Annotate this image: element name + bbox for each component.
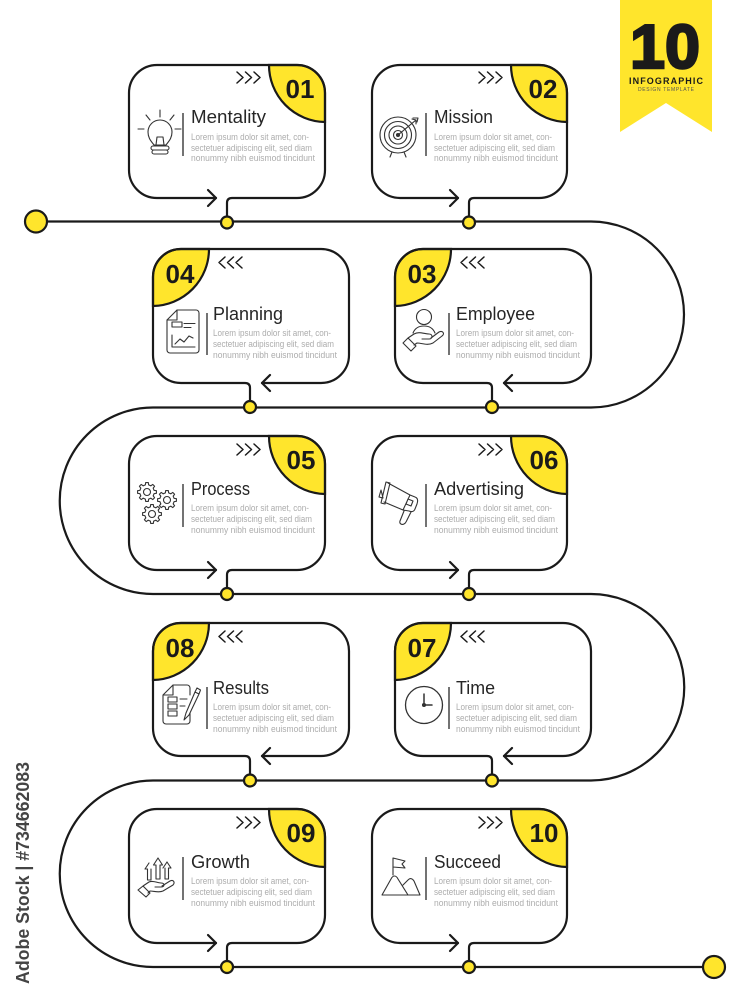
card 09: Growth: Growth	[191, 851, 250, 872]
card 08: Results: sectetuer adipiscing elit, sed diam	[213, 713, 334, 724]
card 04: Planning: nonummy nibh euismod tincidunt	[213, 350, 337, 361]
timeline node	[221, 588, 233, 600]
card 04: Planning	[153, 249, 349, 413]
card 07: Time	[395, 623, 591, 786]
card 09: Growth: nonummy nibh euismod tincidunt	[191, 898, 315, 909]
badge: 10 infographic ribbon: INFOGRAPHIC	[629, 76, 704, 86]
timeline node	[486, 774, 498, 786]
card 09: Growth: Lorem ipsum dolor sit amet, con-	[191, 876, 309, 887]
winding timeline path	[36, 222, 714, 967]
icon: clock	[406, 686, 442, 724]
card 01: Mentality: 01	[286, 74, 314, 104]
timeline node	[463, 216, 475, 228]
card 05: Process: nonummy nibh euismod tincidunt	[191, 525, 315, 536]
card 03: Employee: nonummy nibh euismod tincidunt	[456, 350, 580, 361]
badge: 10 infographic ribbon	[620, 0, 712, 132]
card 04: Planning: 04	[166, 259, 195, 289]
card 06: Advertising: sectetuer adipiscing elit, sed diam	[434, 514, 555, 525]
end node	[703, 956, 725, 978]
card 06: Advertising: Lorem ipsum dolor sit amet, con-	[434, 503, 552, 514]
card 05: Process: Process	[191, 478, 250, 499]
card 01: Mentality: Mentality	[191, 106, 267, 127]
badge: 10 infographic ribbon: DESIGN TEMPLATE	[638, 87, 695, 93]
card 01: Mentality	[129, 65, 325, 228]
card 09: Growth: sectetuer adipiscing elit, sed diam	[191, 887, 312, 898]
card 07: Time: Lorem ipsum dolor sit amet, con-	[456, 702, 574, 713]
card 01: Mentality: nonummy nibh euismod tincidunt	[191, 153, 315, 164]
card 07: Time: nonummy nibh euismod tincidunt	[456, 724, 580, 735]
icon: report document	[167, 310, 199, 353]
card 10: Succeed: nonummy nibh euismod tincidunt	[434, 898, 558, 909]
card 05: Process: Lorem ipsum dolor sit amet, con-	[191, 503, 309, 514]
card 06: Advertising: Advertising	[434, 478, 524, 499]
card 03: Employee	[395, 249, 591, 413]
card 04: Planning: Lorem ipsum dolor sit amet, con-	[213, 328, 331, 339]
card 04: Planning: Planning	[213, 303, 283, 324]
card 03: Employee: Lorem ipsum dolor sit amet, con-	[456, 328, 574, 339]
timeline node	[244, 774, 256, 786]
icon: hand holding person	[403, 310, 443, 351]
card 05: Process	[129, 436, 325, 600]
card 08: Results	[153, 623, 349, 786]
icon: light bulb	[138, 110, 181, 154]
card 02: Mission	[372, 65, 567, 228]
timeline node	[221, 961, 233, 973]
timeline node	[463, 588, 475, 600]
card 08: Results: Lorem ipsum dolor sit amet, con-	[213, 702, 331, 713]
card 05: Process: sectetuer adipiscing elit, sed diam	[191, 514, 312, 525]
icon: hand with growth arrows	[138, 858, 174, 897]
card 10: Succeed: sectetuer adipiscing elit, sed diam	[434, 887, 555, 898]
card 03: Employee: Employee	[456, 303, 535, 324]
card 10: Succeed: Succeed	[434, 851, 501, 872]
card 09: Growth: 09	[287, 818, 315, 848]
card 06: Advertising: nonummy nibh euismod tincidunt	[434, 525, 558, 536]
card 02: Mission: Mission	[434, 106, 493, 127]
card 02: Mission: sectetuer adipiscing elit, sed diam	[434, 143, 555, 154]
icon: megaphone	[379, 482, 418, 524]
card 03: Employee: 03	[408, 259, 436, 289]
card 02: Mission: nonummy nibh euismod tincidunt	[434, 153, 558, 164]
start node	[25, 210, 47, 232]
card 08: Results: Results	[213, 677, 269, 698]
badge: 10 infographic ribbon: 10	[630, 13, 700, 82]
card 04: Planning: sectetuer adipiscing elit, sed diam	[213, 339, 334, 350]
card 09: Growth	[129, 809, 325, 973]
card 05: Process: 05	[287, 445, 315, 475]
card 10: Succeed: 10	[530, 818, 558, 848]
card 02: Mission: 02	[529, 74, 557, 104]
card 06: Advertising: 06	[530, 445, 558, 475]
card 02: Mission: Lorem ipsum dolor sit amet, con-	[434, 132, 552, 143]
card 07: Time: Time	[456, 677, 495, 698]
timeline node	[244, 401, 256, 413]
card 06: Advertising	[372, 436, 567, 600]
card 07: Time: 07	[408, 633, 436, 663]
card 10: Succeed	[372, 809, 567, 973]
timeline node	[486, 401, 498, 413]
card 08: Results: nonummy nibh euismod tincidunt	[213, 724, 337, 735]
timeline node	[463, 961, 475, 973]
icon: mountain with flag	[382, 858, 420, 895]
icon: target with arrow	[380, 117, 418, 157]
card 10: Succeed: Lorem ipsum dolor sit amet, con-	[434, 876, 552, 887]
icon: three gears	[138, 483, 176, 523]
card 08: Results: 08	[166, 633, 194, 663]
timeline node	[221, 216, 233, 228]
icon: checklist with pencil	[163, 685, 200, 724]
card 07: Time: sectetuer adipiscing elit, sed diam	[456, 713, 577, 724]
stock credit vertical text: Adobe Stock | #734662083	[13, 762, 33, 984]
card 03: Employee: sectetuer adipiscing elit, sed diam	[456, 339, 577, 350]
card 01: Mentality: sectetuer adipiscing elit, sed diam	[191, 143, 312, 154]
card 01: Mentality: Lorem ipsum dolor sit amet, con-	[191, 132, 309, 143]
